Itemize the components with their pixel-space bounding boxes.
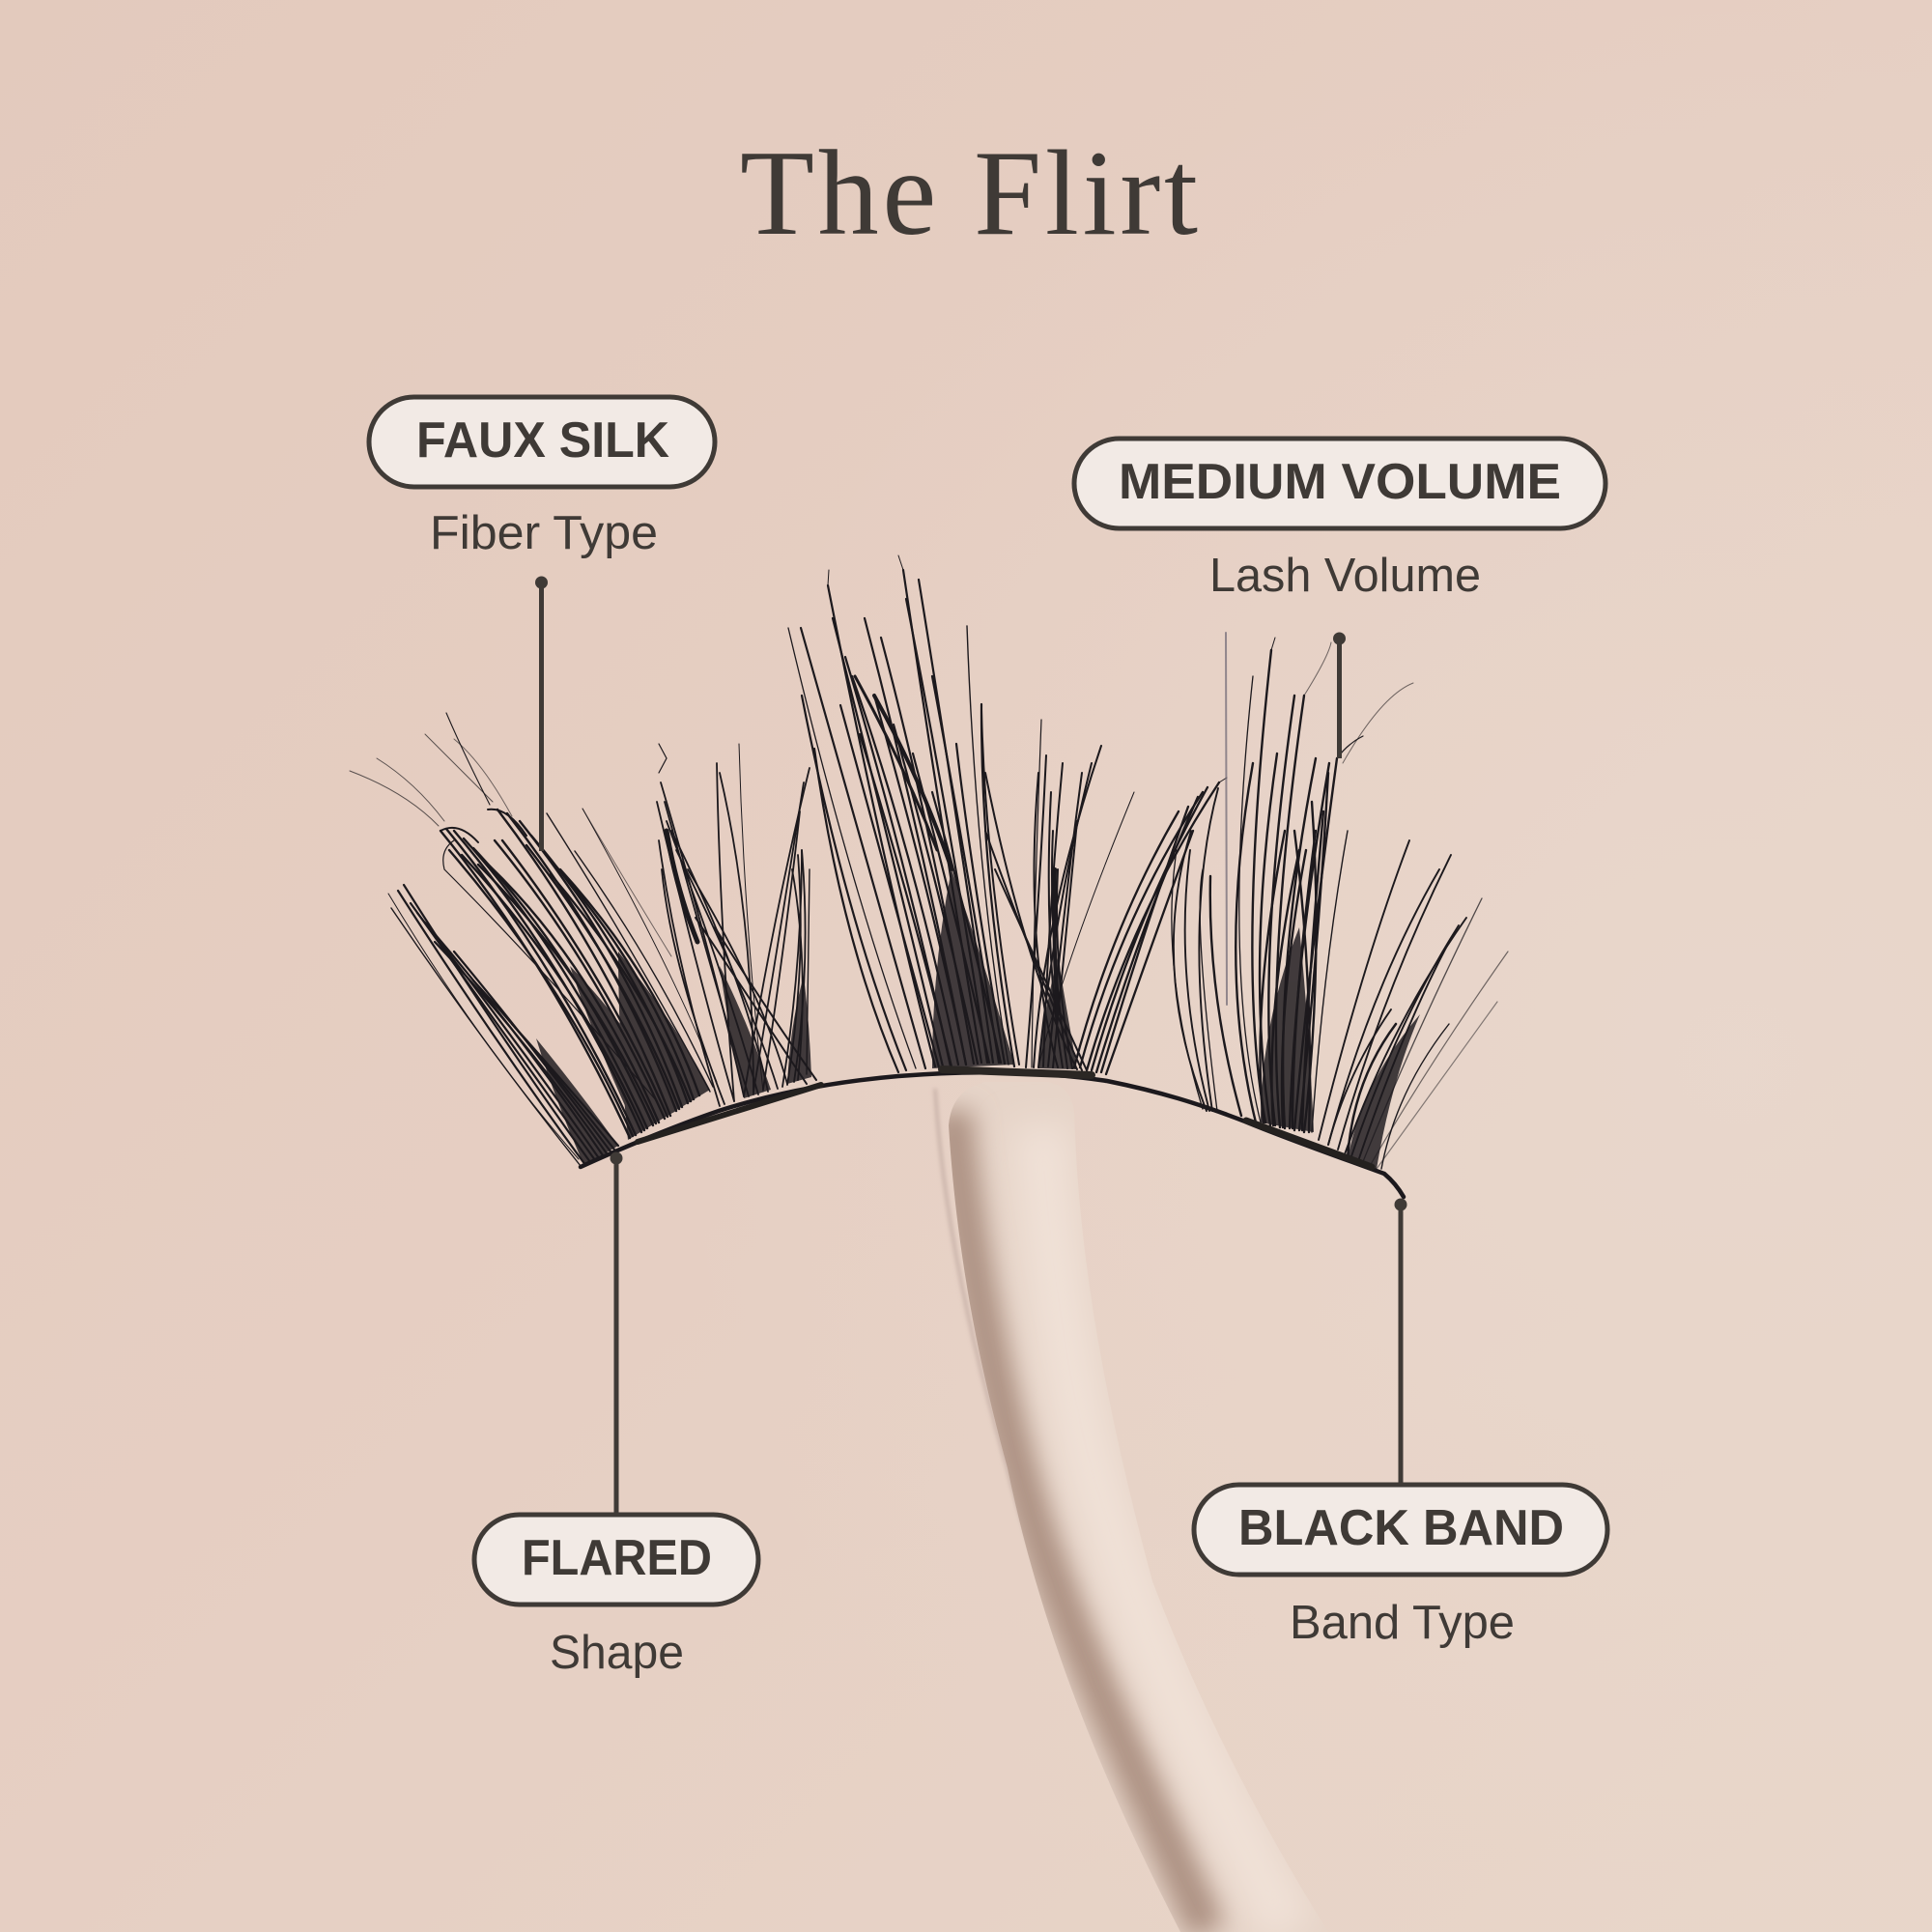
label: Shape: Shape — [550, 1627, 684, 1679]
lash cluster E center right fan — [981, 710, 1134, 1070]
lash clumps — [536, 869, 1420, 1169]
lash cluster A far left — [388, 885, 618, 1166]
connector: band type — [1395, 1198, 1406, 1486]
lash cluster C left-center — [582, 744, 816, 1106]
wand — [933, 1088, 1304, 1932]
lash cluster D center tall — [788, 555, 1014, 1072]
pill: MEDIUM VOLUME — [1074, 439, 1605, 528]
pill: BLACK BAND — [1194, 1485, 1607, 1575]
lash cluster H right tall — [1210, 638, 1413, 1132]
title: The Flirt — [740, 127, 1198, 261]
connector: shape — [611, 1151, 622, 1516]
wand body — [949, 1097, 1304, 1932]
label: Band Type: Band Type — [1290, 1597, 1515, 1649]
connector: lash volume — [1333, 632, 1346, 758]
pill: FLARED — [474, 1515, 758, 1605]
pill: MEDIUM VOLUME: MEDIUM VOLUME — [1119, 454, 1561, 510]
lash cluster I far right — [1312, 831, 1508, 1169]
lash cluster G loose hairs — [1172, 633, 1227, 1111]
lash cluster B left fan — [350, 713, 717, 1138]
lash cluster F right-leaning — [1074, 778, 1227, 1074]
callout: fiber type — [369, 397, 715, 851]
label: Fiber Type: Fiber Type — [430, 507, 658, 559]
pill: BLACK BAND: BLACK BAND — [1238, 1500, 1564, 1556]
pill: FLARED: FLARED — [522, 1530, 712, 1586]
callout: lash volume — [1074, 439, 1605, 758]
connector: fiber type — [535, 576, 548, 851]
label: Lash Volume: Lash Volume — [1209, 550, 1481, 602]
pill: FAUX SILK — [369, 397, 715, 487]
lash band — [581, 1069, 1404, 1197]
pill: FAUX SILK: FAUX SILK — [416, 412, 669, 469]
callout: band type — [1194, 1198, 1607, 1649]
wand left soft edge — [935, 1089, 1180, 1893]
callout: shape — [474, 1151, 758, 1679]
lash — [350, 555, 1508, 1197]
